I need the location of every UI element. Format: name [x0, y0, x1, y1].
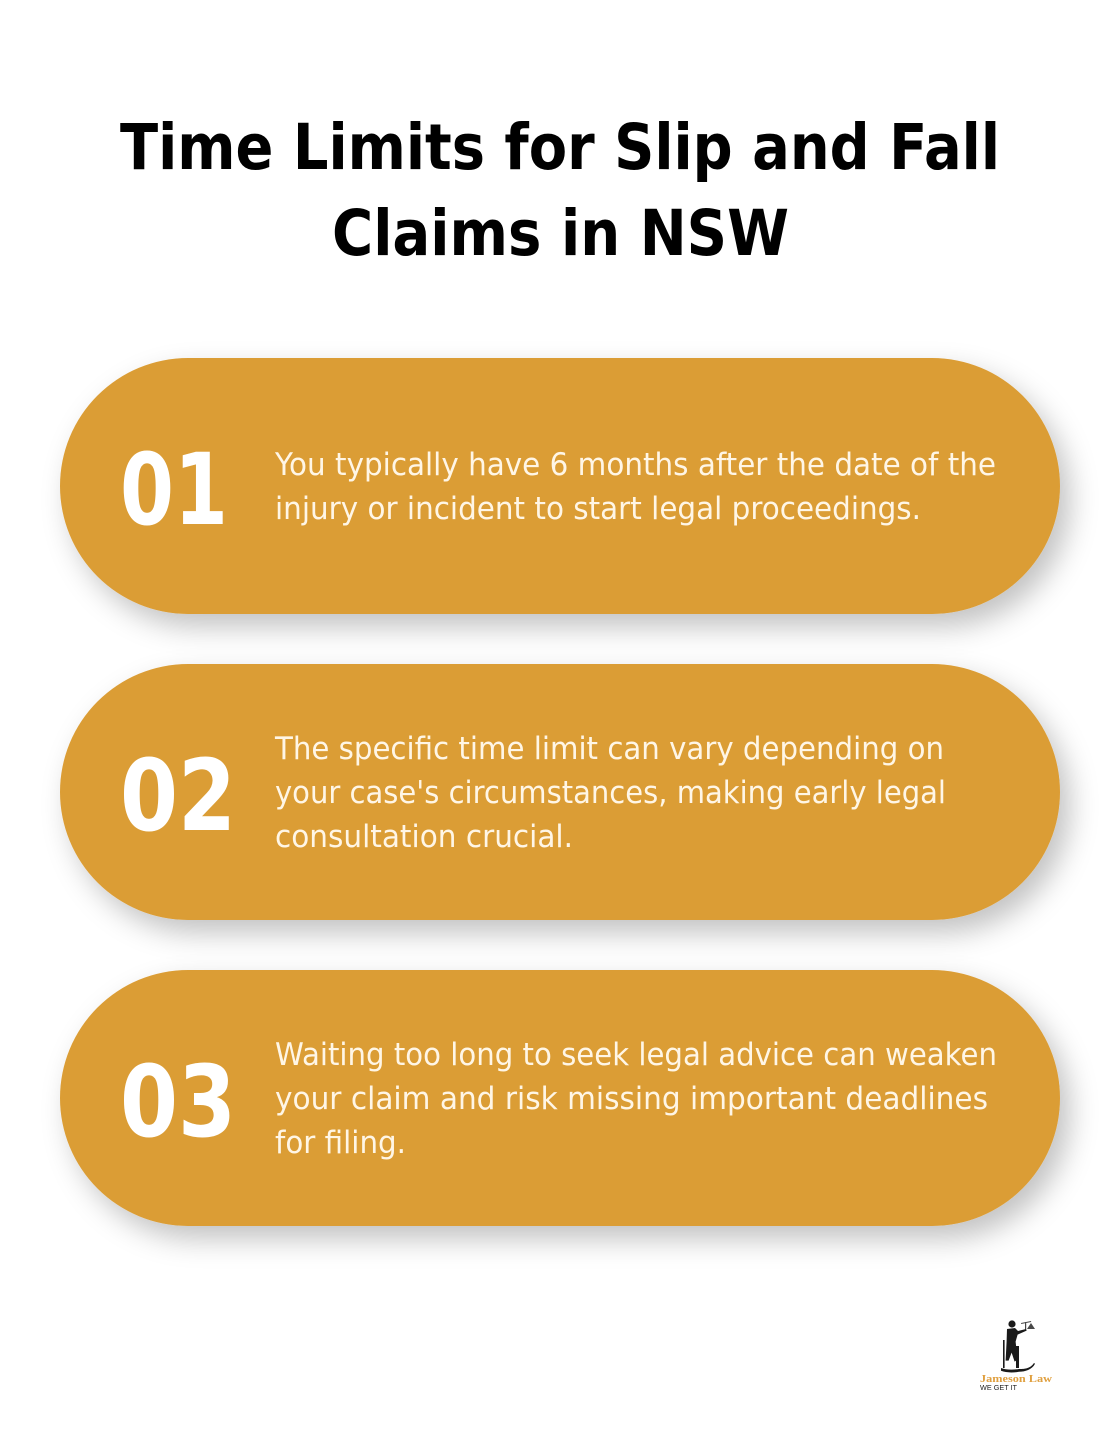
panel: step 03: [60, 970, 1060, 1226]
title: [120, 111, 1000, 270]
step 02 text: The specific time limit can vary depending on: [274, 731, 944, 767]
step 03 text: Waiting too long to seek legal advice can weaken: [275, 1037, 997, 1073]
step 03 text: for filing.: [275, 1125, 406, 1161]
panel: step 01: [60, 358, 1060, 614]
panel: step 02: [60, 664, 1060, 920]
step 03 text: your claim and risk missing important deadlines: [275, 1081, 988, 1117]
step 01 text: injury or incident to start legal proceedings.: [275, 491, 921, 527]
title: Time Limits for Slip and Fall: [120, 111, 1000, 184]
step number 01: 01: [120, 433, 228, 548]
icon: lady justice: [1001, 1320, 1035, 1372]
logo name: Jameson Law: [980, 1373, 1052, 1385]
step 02 text: consultation crucial.: [275, 819, 573, 855]
logo tagline: WE GET IT: [980, 1385, 1018, 1392]
title: Claims in NSW: [332, 197, 789, 270]
step 03 text: [275, 1037, 997, 1161]
step number 02: 02: [120, 739, 236, 854]
step 01 text: [274, 447, 996, 527]
step 02 text: your case's circumstances, making early legal: [275, 775, 946, 811]
step 02 text: [274, 731, 946, 855]
step number 03: 03: [120, 1045, 236, 1160]
step 01 text: You typically have 6 months after the date of the: [274, 447, 996, 483]
logo: Jameson Law: [980, 1320, 1052, 1392]
